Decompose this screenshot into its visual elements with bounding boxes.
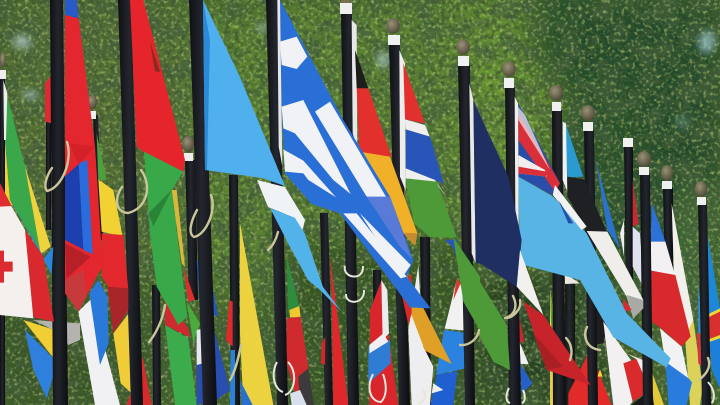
flag: red with blue panel (65, 0, 103, 312)
flag: red with star (568, 350, 612, 405)
flag: green lower tail (480, 282, 510, 370)
flag: white behind (408, 265, 433, 405)
flag: blue white low (431, 239, 465, 405)
flag: dark red back tab (45, 75, 52, 123)
flag: georgia white and red (0, 183, 54, 322)
flag: white behind red (620, 180, 644, 288)
flags blowing right, centre panel (277, 0, 480, 364)
flag: red white blue small (519, 317, 532, 393)
flag: red and green (130, 0, 187, 325)
finials on main poles (0, 0, 707, 205)
white rings lower (274, 266, 714, 403)
flag: fiji sky blue (515, 97, 671, 367)
back poles (46, 115, 673, 405)
flag: black white blue (563, 122, 643, 318)
flag: green yellow red with crest (287, 257, 314, 405)
flag: black and yellow (650, 367, 664, 405)
flag: green and red lower (165, 190, 235, 405)
rope rings (45, 142, 709, 380)
flags blowing right, left panel (0, 0, 187, 333)
flag: greek blue and white (277, 0, 431, 308)
flag: blue red yellow far right (698, 230, 720, 388)
flag: sky blue large (203, 0, 342, 312)
low flags, right panel (519, 180, 720, 405)
flag: blue white red right (651, 203, 703, 405)
flag: germany (352, 20, 417, 246)
flag: yellow green low (550, 290, 558, 405)
flag: navy pole hem (469, 83, 480, 263)
flag: yellow green red stacked (97, 133, 128, 333)
finials on back poles (87, 95, 673, 189)
low flags, left panel (23, 75, 235, 405)
low flags, centre panel (240, 223, 465, 405)
flag: yellow and red tail (113, 312, 152, 405)
flag: orange tail (405, 272, 452, 364)
flag: white and red (603, 322, 651, 405)
flag: white and blue lower (78, 280, 120, 405)
flag: green and yellow left (3, 80, 53, 275)
flags blowing right, right panel (far to near) (480, 97, 671, 385)
flag: red white blue back (368, 280, 398, 405)
flag: black hanging (588, 293, 608, 345)
flag: navy white red (480, 115, 591, 385)
flag: red narrow (330, 255, 348, 405)
flag: gambia red blue green (399, 50, 480, 331)
flag: tall yellow (240, 223, 273, 405)
flag: blue and yellow low left (23, 320, 80, 398)
